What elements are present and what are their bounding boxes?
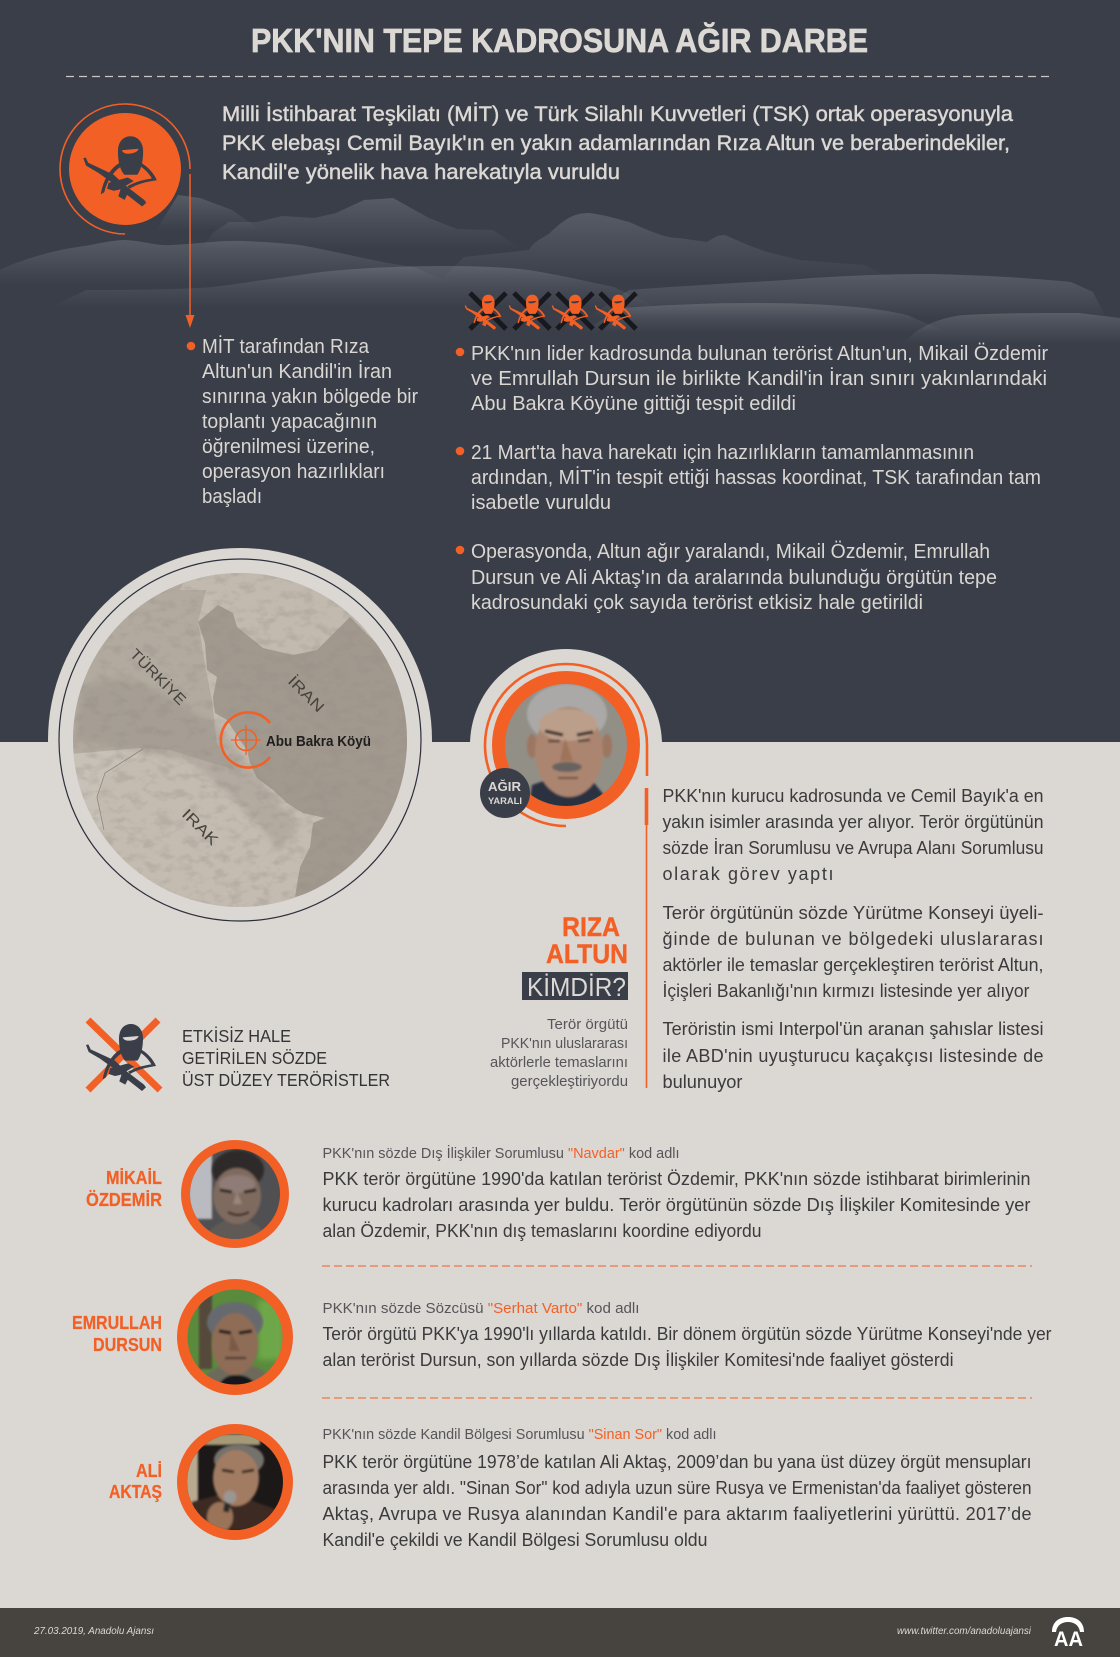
description (322, 1452, 1032, 1550)
text block: Rıza Altun summary: aktörlerle temaslarını (490, 1054, 628, 1071)
text block: Rıza Altun biography: Teröristin ismi Interpol'ün aranan şahıslar listesi (662, 1019, 1044, 1039)
text block: Rıza Altun biography: sözde İran Sorumlusu ve Avrupa Alanı Sorumlusu (662, 838, 1044, 858)
text block: Rıza Altun biography: aktörler ile temaslar gerçekleştiren terörist Altun, (662, 955, 1044, 975)
person: Emrullah Dursun (72, 1279, 1052, 1395)
text block: left bullet: toplantı yapacağının (202, 411, 377, 433)
text block: Rıza Altun summary: PKK'nın uluslararası (501, 1035, 628, 1052)
logo: AA (1052, 1617, 1084, 1651)
description: Terör örgütü PKK'ya 1990'lı yıllarda katıldı. Bir dönem örgütün sözde Yürütme Konseyi'nde yer (322, 1324, 1052, 1344)
photo (177, 1279, 293, 1395)
orange line and bar (645, 788, 648, 825)
description: alan Özdemir, PKK'nın dış temaslarını koordine ediyordu (322, 1221, 762, 1241)
name (86, 1167, 162, 1210)
heading: Rıza Altun kimdir (522, 912, 628, 1002)
description: alan terörist Dursun, son yıllarda sözde Dış İlişkiler Komitesi'nde faaliyet gösterdi (322, 1350, 954, 1370)
portrait: Rıza Altun (470, 649, 662, 1088)
text block: left bullet: MİT tarafından Rıza (202, 335, 370, 358)
description: PKK terör örgütüne 1978’de katılan Ali Aktaş, 2009’dan bu yana üst düzey örgüt mensupları (322, 1452, 1032, 1472)
Iran (198, 605, 408, 897)
code name: PKK'nın sözde Sözcüsü "Serhat Varto" kod adlı (322, 1300, 640, 1317)
badge: ağır yaralı: AĞIR (488, 779, 522, 794)
map label: İran: İRAN (284, 672, 328, 716)
text block: Rıza Altun biography (662, 786, 1044, 1092)
name: MİKAİL (106, 1167, 162, 1188)
footer url: www.twitter.com/anadoluajansi (897, 1625, 1032, 1637)
legend text: ÜST DÜZEY TERÖRİSTLER (182, 1070, 390, 1090)
map label: Abu Bakra Köyü: Abu Bakra Köyü (266, 734, 371, 750)
name (109, 1460, 162, 1502)
text block: left bullet: öğrenilmesi üzerine, (202, 436, 375, 458)
bullet 3 (456, 541, 997, 614)
title: PKK'NIN TEPE KADROSUNA AĞIR DARBE (251, 22, 868, 59)
text block: left bullet: sınırına yakın bölgede bir (202, 386, 418, 408)
logo: AA: AA (1054, 1628, 1083, 1651)
description: arasında yer aldı. "Sinan Sor" kod adıyla uzun süre Rusya ve Ermenistan'da faaliyet gösteren (322, 1478, 1032, 1498)
name: DURSUN (93, 1334, 162, 1355)
description: Aktaş, Avrupa ve Rusya alanından Kandil'e para aktarım faaliyetlerini yürüttü. 2017’de (322, 1504, 1032, 1524)
text block: Rıza Altun summary: gerçekleştiriyordu (511, 1073, 628, 1090)
description (322, 1324, 1052, 1370)
code name: PKK'nın sözde Kandil Bölgesi Sorumlusu "Sinan Sor" kod adlı (322, 1426, 716, 1443)
text block: Rıza Altun biography: yakın isimler arasında yer alıyor. Terör örgütünün (662, 812, 1044, 832)
mountain silhouettes (0, 195, 1120, 352)
bullet 2: ardından, MİT'in tespit ettiği hassas koordinat, TSK tarafından tam (471, 466, 1041, 489)
photo (181, 1140, 289, 1248)
intro text (222, 103, 1013, 184)
badge: ağır yaralı (480, 768, 530, 818)
bullet 1: PKK'nın lider kadrosunda bulunan terörist Altun'un, Mikail Özdemir (471, 343, 1048, 365)
description (322, 1169, 1031, 1241)
bullet 1 (456, 343, 1048, 415)
heading: Rıza Altun kimdir: ALTUN (546, 939, 628, 969)
text block: right bullets (456, 343, 1048, 614)
dashed divider (66, 76, 1054, 78)
map label: Türkiye: TÜRKİYE (126, 645, 190, 709)
map panel (48, 548, 432, 932)
text block: left bullet: operasyon hazırlıkları (202, 461, 385, 483)
footer date: 27.03.2019, Anadolu Ajansı (33, 1625, 154, 1637)
intro text: PKK elebaşı Cemil Bayık'ın en yakın adamlarından Rıza Altun ve beraberindekiler, (222, 132, 1010, 155)
text block: Rıza Altun biography: Terör örgütünün sözde Yürütme Konseyi üyeli- (662, 903, 1044, 923)
heading: Rıza Altun kimdir: KİMDİR? (527, 972, 626, 1002)
bullet 3: Operasyonda, Altun ağır yaralandı, Mikail Özdemir, Emrullah (471, 541, 990, 563)
name: ALİ (136, 1460, 162, 1481)
map label: Irak: IRAK (178, 806, 221, 849)
icon: militant in orange circle (60, 104, 190, 234)
bullet 1: Abu Bakra Köyüne gittiği tespit edildi (471, 393, 796, 415)
text block: Rıza Altun summary: Terör örgütü (547, 1016, 628, 1033)
bullet 3: Dursun ve Ali Aktaş'ın da aralarında bulunduğu örgütün tepe (471, 567, 997, 589)
arrow: from icon to first bullet (186, 174, 194, 328)
footer (0, 1608, 1120, 1657)
text block: Rıza Altun summary (490, 1016, 628, 1090)
map target marker (221, 712, 270, 767)
text block: Rıza Altun biography: PKK'nın kurucu kadrosunda ve Cemil Bayık'a en (662, 786, 1044, 806)
name (72, 1312, 162, 1355)
description: Kandil'e çekildi ve Kandil Bölgesi Sorumlusu oldu (322, 1530, 708, 1550)
bullet 1: ve Emrullah Dursun ile birlikte Kandil'in İran sınırı yakınlarındaki (471, 367, 1047, 390)
intro text: Milli İstihbarat Teşkilatı (MİT) ve Türk Silahlı Kuvvetleri (TSK) ortak operasyonuyla (222, 103, 1013, 126)
text block: Rıza Altun biography: ile ABD'nin uyuşturucu kaçakçısı listesinde de (662, 1046, 1044, 1066)
background: light lower section (0, 742, 1120, 1608)
text block: left bullet (187, 335, 418, 508)
terrain mottling (76, 573, 366, 906)
text block: Rıza Altun biography: bulunuyor (662, 1072, 743, 1092)
person: Mikail Özdemir (86, 1140, 1031, 1248)
code name: PKK'nın sözde Dış İlişkiler Sorumlusu "Navdar" kod adlı (322, 1144, 680, 1162)
heading: Rıza Altun kimdir: RIZA (562, 912, 620, 942)
text block: Rıza Altun biography: ğinde de bulunan ve bölgedeki uluslararası (662, 929, 1044, 949)
text block: Rıza Altun biography: İçişleri Bakanlığı'nın kırmızı listesinde yer alıyor (662, 981, 1030, 1001)
legend text: ETKİSİZ HALE (182, 1026, 291, 1046)
Turkey (70, 570, 235, 770)
Syria (74, 749, 128, 755)
bullet 3: kadrosundaki çok sayıda terörist etkisiz hale getirildi (471, 592, 923, 614)
text block: left bullet: başladı (202, 486, 262, 508)
legend icon: crossed-out militant (86, 1020, 160, 1091)
icons: four crossed-out militants (465, 293, 636, 330)
legend text (182, 1026, 390, 1090)
name: EMRULLAH (72, 1312, 162, 1333)
name: ÖZDEMİR (86, 1189, 162, 1210)
background: dark upper section (0, 0, 1120, 742)
description: kurucu kadroları arasında yer buldu. Terör örgütünün sözde Dış İlişkiler Komitesinde yer (322, 1195, 1031, 1215)
name: AKTAŞ (109, 1481, 162, 1502)
photo (177, 1424, 293, 1540)
bullet 2: 21 Mart'ta hava harekatı için hazırlıkların tamamlanmasının (471, 442, 974, 464)
text block: left bullet: Altun'un Kandil'in İran (202, 360, 392, 383)
bullet 2 (456, 442, 1041, 514)
description: PKK terör örgütüne 1990'da katılan terörist Özdemir, PKK'nın sözde istihbarat birimlerinin (322, 1169, 1030, 1189)
person: Ali Aktaş (109, 1424, 1032, 1550)
intro text: Kandil'e yönelik hava harekatıyla vuruldu (222, 161, 620, 184)
text block: Rıza Altun biography: olarak görev yaptı (662, 864, 834, 884)
bullet 2: isabetle vuruldu (471, 492, 611, 514)
badge: ağır yaralı: YARALI (488, 796, 522, 807)
legend text: GETİRİLEN SÖZDE (182, 1048, 327, 1068)
